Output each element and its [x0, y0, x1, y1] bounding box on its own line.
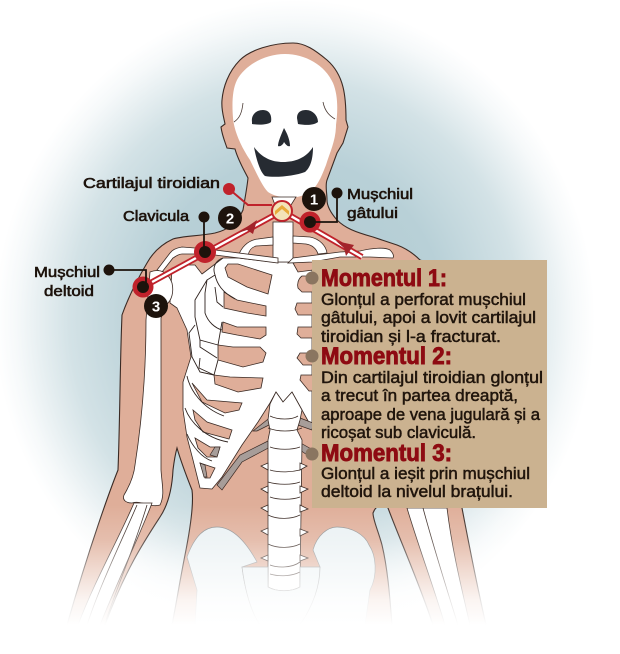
heading: Momentul 3: Momentul 3:: [321, 440, 452, 467]
thorax and scapula: [170, 258, 312, 489]
label: Mușchiul gâtului: Mușchiul: [347, 186, 413, 203]
label: Mușchiul gâtului: [347, 186, 413, 222]
text: moment 2: Din cartilajul tiroidian glonțul: [321, 369, 543, 387]
icon: thyroid cartilage: [272, 201, 292, 221]
text: moment 2: [321, 369, 543, 442]
panel bullets: [306, 272, 318, 460]
panel: bullet moments: [312, 260, 547, 508]
text: moment 1: Glonțul a perforat mușchiul: [321, 291, 526, 309]
skull eye sockets: [252, 110, 318, 125]
text: moment 1: tiroidian și l-a fracturat.: [321, 328, 501, 346]
text: moment 1: [321, 291, 536, 346]
rib outlines: [185, 258, 235, 461]
first ribs: [238, 236, 327, 258]
point 1 neck muscle: [300, 188, 342, 232]
heading: Momentul 2: Momentul 2:: [321, 343, 452, 370]
point 2 clavicle: [194, 212, 216, 263]
text: moment 3: deltoid la nivelul brațului.: [321, 483, 513, 501]
skull: [232, 54, 337, 198]
number badge 2: 2: [226, 210, 234, 228]
point 3 deltoid: [104, 264, 154, 298]
number badge 1: 1: [310, 192, 318, 208]
label: Cartilajul tiroidian: Cartilajul tiroidian: [83, 175, 220, 192]
text: moment 2: aproape de vena jugulară și a: [321, 406, 541, 424]
abdominal muscle strips: [200, 416, 313, 490]
skull nose: [278, 128, 290, 146]
number badge 2: [218, 206, 242, 230]
label: Mușchiul deltoid: deltoid: [44, 283, 94, 300]
text: moment 1: gâtului, apoi a lovit cartilajul: [321, 309, 536, 327]
right arm bones: [407, 508, 470, 625]
text: moment 2: ricoșat sub claviculă.: [321, 424, 476, 442]
label: Clavicula: Clavicula: [123, 208, 190, 225]
body silhouette: [67, 43, 540, 625]
bullet trajectory: [143, 211, 362, 287]
skull mouth: [254, 147, 313, 177]
label: Mușchiul deltoid: Mușchiul: [34, 264, 100, 281]
bottom fade: [0, 505, 620, 654]
neck column: [272, 197, 296, 262]
pelvis: [187, 527, 375, 625]
intercostal spaces: [192, 260, 313, 478]
clavicles: [157, 247, 393, 272]
spine: [261, 392, 308, 591]
icon: trajectory arrows: [238, 220, 354, 256]
number badge 1: [302, 187, 326, 211]
number badge 3: 3: [152, 298, 160, 316]
label: Mușchiul deltoid: [34, 264, 100, 300]
text: moment 3: Glonțul a ieșit prin mușchiul: [321, 465, 530, 483]
left arm bones: [78, 270, 173, 625]
text: moment 2: a trecut în partea dreaptă,: [321, 387, 518, 405]
leader: cartilajul tiroidian: [223, 183, 272, 205]
label: Mușchiul gâtului: gâtului: [347, 205, 398, 222]
number badge 3: [144, 294, 168, 318]
skeleton: [78, 54, 470, 625]
heading: Momentul 1: Momentul 1:: [321, 265, 447, 292]
text: moment 3: [321, 465, 530, 501]
